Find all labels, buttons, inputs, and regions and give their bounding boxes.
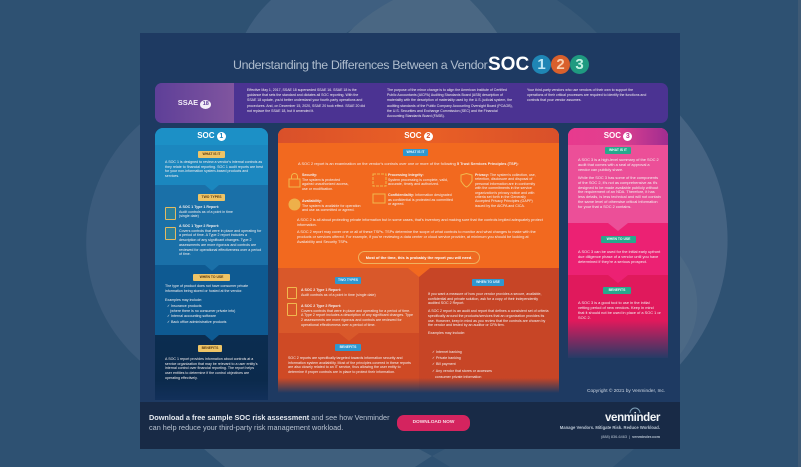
callout pill bbox=[358, 251, 480, 264]
examples checklist: (where there is no consumer private info) bbox=[170, 309, 235, 313]
availability text bbox=[302, 199, 361, 212]
main card bbox=[140, 33, 680, 449]
arrow notch soc2 benefits bbox=[340, 333, 358, 340]
numeral badge 1 bbox=[532, 55, 551, 74]
panel: SSAE 18 band bbox=[155, 83, 668, 123]
SOC 1 when to use section bbox=[155, 265, 268, 335]
SSAE 18 label: SSAE bbox=[178, 98, 198, 107]
arrow notch soc1 when bbox=[205, 265, 219, 271]
processing integrity text: System processing is complete, valid, accurate, timely and authorized. bbox=[388, 178, 448, 186]
benefits text: A SOC 1 report provides information about controls at a service organization that may be relevant to a user entity's internal control over financial reporting. The report helps user entities to determine if the control objectives are operating effectively. bbox=[165, 357, 258, 380]
when to use tag: WHEN TO USE bbox=[200, 275, 223, 279]
SOC 1 benefits section bbox=[155, 335, 268, 400]
when to use text bbox=[428, 292, 548, 335]
title bbox=[233, 54, 589, 75]
when to use text: The type of product does not have consumer private information being stored or hosted at the vendor. bbox=[165, 284, 248, 293]
numeral badge 2: 2 bbox=[556, 56, 565, 73]
examples checklist: ✓ Internal accounting software bbox=[167, 314, 216, 318]
SOC 2 description: A SOC 2 report may cover one or all of these TSPs. TSPs determine the scope of what controls to monitor and what changes to make with the products or services offered. For example, if you're reviewing a data center or cloud service provider, at minimum you should be looking at Availability and Security TSPs. bbox=[297, 230, 536, 244]
tagline: Manage Vendors. Mitigate Risk. Reduce Workload. bbox=[560, 425, 660, 430]
benefits tag: BENEFITS bbox=[340, 345, 356, 349]
confidentiality text: Confidentiality: Information designated as confidential is protected as committed or agreed. bbox=[388, 193, 453, 206]
SSAE 18 label: 18 bbox=[203, 101, 209, 107]
examples checklist: ✓ Private banking bbox=[432, 356, 461, 360]
intro text: A SOC 2 report is an examination on the vendor's controls over one or more of the following 5 Trust Services Principles (TSP): bbox=[298, 161, 519, 166]
SOC 3 header: SOC bbox=[604, 131, 621, 140]
when to use tag: WHEN TO USE bbox=[476, 280, 500, 284]
when to use text: A SOC 3 can be used for the initial early upfront due diligence phase of a vendor until you have determined if they're a serious prospect. bbox=[578, 249, 660, 264]
benefits tag bbox=[198, 345, 222, 352]
availability text: Availability: bbox=[302, 199, 322, 203]
doc icon 2 bbox=[287, 303, 297, 316]
numeral badge 1: 1 bbox=[537, 56, 546, 73]
processing integrity text: Processing Integrity: bbox=[388, 173, 424, 177]
SOC 2 what is it section bbox=[278, 128, 559, 268]
benefits text: A SOC 3 is a good tool to use in the initial vetting period of new vendors. Keep in mind that it should not be used in place of a SOC 1 or SOC 2. bbox=[578, 300, 661, 320]
SOC 2 header: SOC bbox=[404, 131, 422, 140]
SSAE text 1: Effective May 1, 2017, SSAE 18 superseded SSAE 16. SSAE 18 is the guidance that sets the standard and dictates all SOC reporting. With the SSAE 18 update, you'd better understand your fourth-party operations and procedures. And, on December 15, 2020, SSAE 20 took effect. SSAE 20 did not replace the SSAE 18, but it amended it. bbox=[247, 88, 365, 113]
type 2 text: Covers controls that were in place and operating for a period of time. A Type 2 report includes a description of any significant changes. Type 2 assessments are more rigorous and controls are reviewed for operational effectiveness over a period of time. bbox=[301, 309, 413, 327]
SOC 1 header: SOC bbox=[197, 131, 215, 140]
arrow notch soc1 bbox=[205, 185, 219, 191]
SOC 2 description: A SOC 2 is all about protecting private information but in some cases, that's inventory and making sure that the controls implied adequately protect information. bbox=[297, 218, 543, 227]
SOC 3 benefits section bbox=[568, 275, 668, 358]
SOC 1 header bbox=[155, 128, 268, 145]
call to action text: can help reduce your third-party risk management workload. bbox=[149, 422, 343, 432]
numeral badge 3 bbox=[570, 55, 589, 74]
SOC 3 what is it section bbox=[568, 128, 668, 223]
type 1 text: A SOC 2 Type 1 Report: bbox=[301, 288, 341, 292]
type 1 text: A SOC 1 Type 1 Report: bbox=[179, 205, 219, 209]
when to use tag bbox=[472, 279, 504, 286]
examples checklist: ✓ Insurance products bbox=[167, 304, 202, 308]
type 1 text: Audit controls as of a point in time (single date) bbox=[179, 210, 233, 218]
when to use text: If you want a measure of how your vendor provides a secure, available, confidential and private solution, ask for a copy of their independently audited SOC 2 Report. bbox=[428, 292, 541, 305]
type 1 text bbox=[179, 205, 233, 218]
SOC 1 header: 1 bbox=[219, 133, 223, 140]
type 2 text: Covers controls that were in place and operating for a period of time. A Type 2 report includes a description of any significant changes. Type 2 assessments are more rigorous and controls are reviewed for operational effectiveness over a period of time. bbox=[179, 229, 261, 256]
panel: SOC 1 bbox=[155, 128, 268, 400]
benefits tag bbox=[603, 287, 631, 294]
benefits tag: BENEFITS bbox=[609, 288, 625, 292]
what is it tag: WHAT IS IT bbox=[406, 150, 425, 154]
two types tag: TWO TYPES bbox=[338, 278, 358, 282]
privacy text: Privacy: The system's collection, use, retention, disclosure and disposal of personal information are in conformity with the commitments in the service organization's privacy notice and with criteria set forth in the Generally Accepted Privacy Principles (GAPP) issued by the AICPA and CICA. bbox=[475, 173, 536, 208]
when to use text: A SOC 2 report is an audit and report that defines a consistent set of criteria specifically around the products/services that an organization provides its use. However, keep in mind as you review that the controls are chosen by the vendor and tested by an auditor or CPA firm. bbox=[428, 309, 548, 327]
venminder logo bbox=[560, 408, 660, 439]
logo wordmark: venminder bbox=[605, 411, 660, 424]
copyright: Copyright © 2021 by Venminder, Inc. bbox=[587, 389, 665, 394]
document icon type 1 bbox=[165, 207, 176, 220]
icon confidentiality bbox=[372, 194, 386, 204]
examples checklist: consumer private information bbox=[435, 375, 481, 379]
what is it text: While the SOC 3 has some of the components of the SOC 2, it's not as comprehensive as it's designed to be made available publicly without the requirement of an NDA. Therefore, it has less details, is less technical and will not contain the same level of otherwise critical information for your that a SOC 2 contains. bbox=[578, 175, 661, 209]
two types tag bbox=[335, 277, 361, 284]
panel: SOC 3 bbox=[568, 128, 668, 358]
SOC 2 description bbox=[297, 218, 543, 244]
icon processing bbox=[372, 174, 386, 186]
arrow notch soc3 benefits bbox=[608, 275, 628, 283]
contact line: (888) 836-6463 | venminder.com bbox=[601, 435, 660, 439]
examples checklist: ✓ Bill payment bbox=[432, 362, 456, 366]
what is it tag: WHAT IS IT bbox=[202, 152, 221, 156]
download button bbox=[397, 415, 470, 431]
numeral badge 3: 3 bbox=[575, 56, 584, 73]
examples checklist: ✓ Back office administrative products bbox=[167, 320, 226, 324]
two types tag: TWO TYPES bbox=[202, 195, 221, 199]
SOC 2 two types section bbox=[279, 268, 419, 333]
when to use text: Examples may include: bbox=[165, 298, 202, 302]
icon lock bbox=[288, 173, 300, 188]
SOC 3 header bbox=[568, 128, 668, 145]
SOC 2 header: 2 bbox=[426, 133, 430, 140]
download button: DOWNLOAD NOW bbox=[413, 420, 454, 425]
doc icon 1 bbox=[287, 287, 297, 299]
two types tag bbox=[198, 194, 225, 201]
availability text: The system is available for operation and use as committed or agreed. bbox=[302, 204, 361, 212]
benefits text: SOC 2 reports are specifically targeted towards information security and information system availability. Most of the principles covered in these reports are also closely related to an IT service, thus allowing the user entity to determine if proper controls are in place to protect their information. bbox=[288, 356, 411, 374]
icon availability bbox=[288, 198, 300, 210]
type 2 text: A SOC 1 Type 2 Report: bbox=[179, 224, 219, 228]
document icon type 2 bbox=[165, 227, 176, 240]
SOC 3 when to use section bbox=[568, 223, 668, 275]
when to use tag bbox=[193, 274, 230, 281]
security text: Security: bbox=[302, 173, 317, 177]
when to use tag: WHEN TO USE bbox=[607, 237, 630, 241]
benefits tag bbox=[335, 344, 361, 351]
call to action text bbox=[149, 413, 390, 432]
SSAE text 2: The purpose of the minor change is to align the American Institute of Certified Public Accountants (AICPA) Auditing Standards Board (ASB) description of materiality with the description of materiality used by the U.S. judicial system, the auditing standards of the Public Company Accounting Oversight Board (PCAOB), the U.S. Securities and Exchange Commission (SEC) and the Financial Accounting Standards Board (FASB). bbox=[387, 88, 513, 118]
when to use tag bbox=[601, 236, 636, 243]
examples checklist: ✓ Internet banking bbox=[432, 350, 462, 354]
icon shield bbox=[460, 173, 472, 188]
callout pill: Most of the time, this is probably the report you will need. bbox=[366, 255, 472, 260]
logo arc bbox=[630, 408, 640, 413]
SOC 2 when to use section bbox=[419, 268, 559, 393]
what is it text bbox=[578, 157, 661, 209]
examples checklist bbox=[167, 304, 236, 324]
arrow notch soc1 benefits bbox=[205, 335, 219, 341]
SSAE 18 label bbox=[155, 83, 234, 123]
what is it text: A SOC 1 is designed to review a vendor's internal controls as they relate to financial reporting. SOC 1 audit reports are best for your non-information system-based products and services. bbox=[165, 160, 263, 178]
benefits tag: BENEFITS bbox=[202, 346, 218, 350]
when to use text bbox=[165, 284, 248, 302]
bottom fade bbox=[278, 378, 559, 393]
what is it tag bbox=[403, 149, 428, 156]
type 1 text bbox=[301, 288, 376, 297]
arrow notch soc2 bbox=[408, 268, 430, 277]
numeral badge 2 bbox=[551, 55, 570, 74]
what is it tag: WHAT IS IT bbox=[609, 148, 627, 152]
what is it text: A SOC 3 is a high-level summary of the SOC 2 audit that comes with a seal of approval a vendor can publicly share. bbox=[578, 157, 659, 172]
SOC 3 header: 3 bbox=[626, 133, 630, 140]
what is it tag bbox=[198, 151, 225, 158]
SOC wordmark: SOC bbox=[488, 54, 529, 75]
SOC 1 two types section bbox=[155, 185, 268, 265]
SOC 1 what is it section bbox=[155, 128, 268, 185]
call to action text: Download a free sample SOC risk assessment and see how Venminder bbox=[149, 413, 390, 422]
SOC 2 benefits section bbox=[288, 344, 411, 374]
arrow notch soc3 bbox=[608, 223, 628, 231]
type 2 text: A SOC 2 Type 2 Report: bbox=[301, 304, 341, 308]
security text: The system is protected against unauthorized access, use or modification. bbox=[302, 178, 349, 191]
type 1 text: Audit controls as of a point in time (single date) bbox=[301, 293, 376, 297]
what is it tag bbox=[605, 147, 631, 154]
SOC 2 header bbox=[278, 128, 559, 143]
examples checklist bbox=[432, 350, 492, 379]
panel: SOC 2 bbox=[278, 128, 559, 393]
SSAE text 3: Your third-party vendors who use vendors of their own to support the operations of their critical processes are required to identify the functions and controls that your vendor assumes. bbox=[527, 88, 646, 102]
when to use text: Examples may include: bbox=[428, 331, 465, 335]
processing integrity text bbox=[388, 173, 448, 186]
examples checklist: ✓ Any vendor that stores or accesses bbox=[432, 369, 492, 373]
panel: footer bbox=[140, 402, 680, 449]
title text: Understanding the Differences Between a Vendor bbox=[233, 58, 487, 72]
